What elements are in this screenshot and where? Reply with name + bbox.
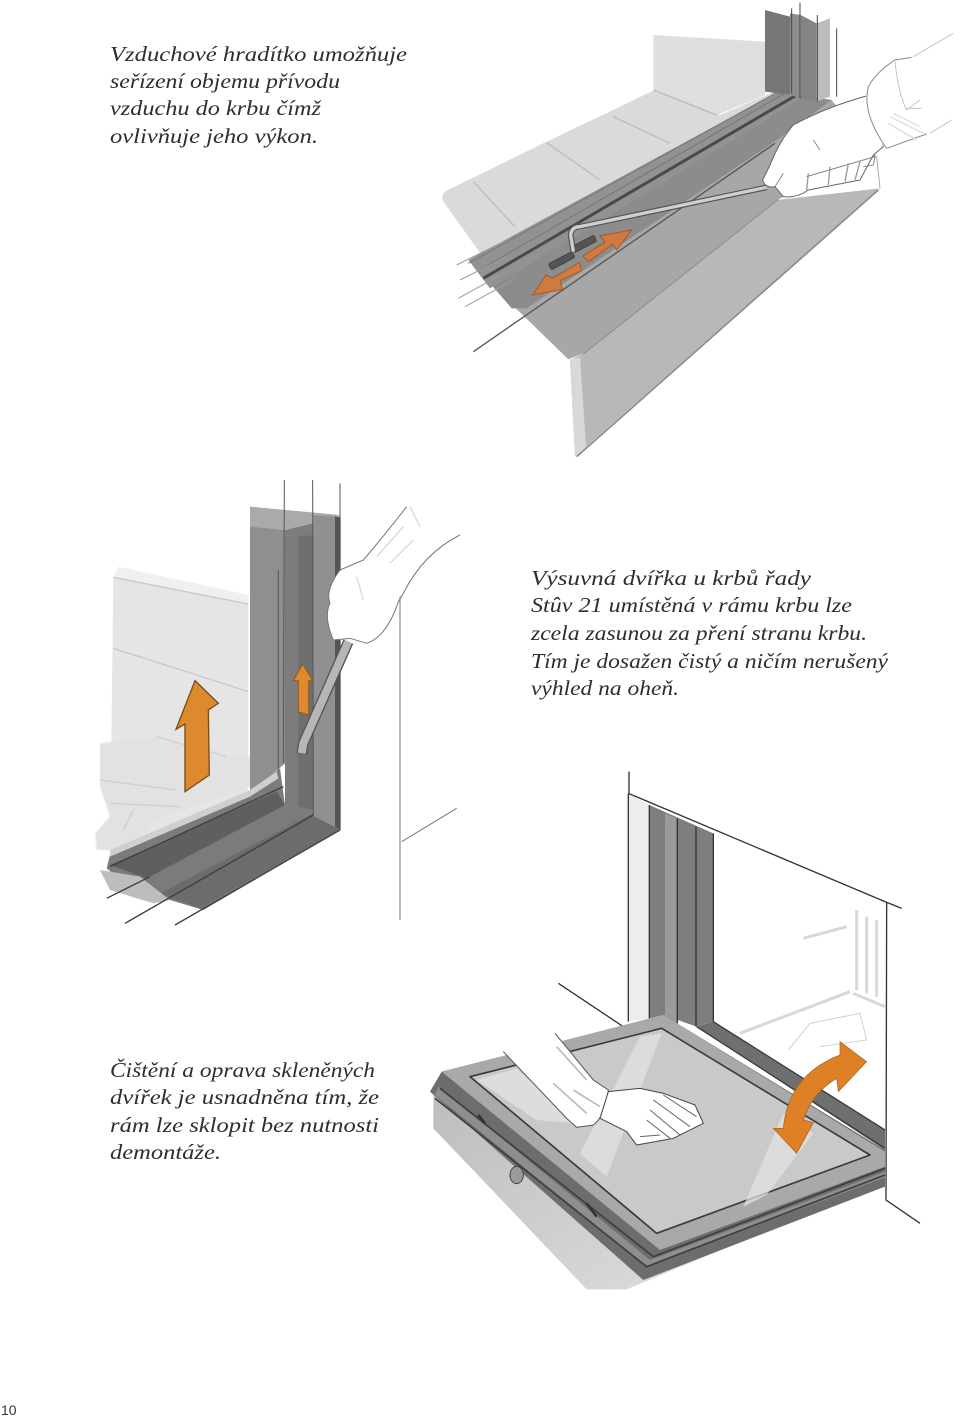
blurred hand behind glass bbox=[95, 737, 277, 850]
damper slot bbox=[548, 235, 597, 270]
sleeve on arm bbox=[503, 1033, 608, 1127]
large orange arrow bbox=[176, 681, 218, 792]
frame rail bbox=[468, 83, 802, 288]
hand on rod bbox=[327, 507, 460, 643]
door handle bbox=[510, 1166, 523, 1184]
lower frame rail bbox=[697, 1022, 885, 1150]
text block: sliding door: zcela zasunou za pření stranu krbu. bbox=[530, 621, 867, 645]
hand with cloth bbox=[600, 1088, 703, 1145]
text block: cleaning glass bbox=[110, 1058, 379, 1164]
glass pane bbox=[470, 1028, 870, 1233]
illustration: sliding door bbox=[95, 480, 460, 925]
text block: sliding door: výhled na oheň. bbox=[531, 676, 679, 700]
text block: cleaning glass: demontáže. bbox=[110, 1140, 221, 1164]
small orange arrow bbox=[293, 664, 313, 715]
text block: air damper: Vzduchové hradítko umožňuje bbox=[110, 42, 407, 66]
text block: cleaning glass: Čištění a oprava skleněných bbox=[110, 1058, 375, 1082]
illustration: tilting door for cleaning bbox=[430, 772, 920, 1289]
lever rod bbox=[571, 187, 767, 252]
text block: air damper bbox=[110, 42, 407, 148]
floor shadow bbox=[433, 1093, 797, 1289]
orange arrow right bbox=[583, 230, 632, 262]
dark frame column bbox=[628, 793, 713, 1027]
back wall panel bbox=[653, 35, 765, 115]
right wall lines bbox=[400, 597, 457, 920]
floor tile joints bbox=[473, 90, 717, 227]
firebox floor bbox=[442, 83, 793, 267]
text block: sliding door: Výsuvná dvířka u krbů řady bbox=[531, 566, 812, 590]
vertical frame post bbox=[765, 3, 837, 102]
text block: sliding door: Stûv 21 umístěná v rámu krbu lze bbox=[531, 593, 852, 617]
front face of sill bbox=[570, 188, 880, 457]
text block: air damper: seřízení objemu přívodu bbox=[110, 69, 340, 93]
illustration: air damper adjustment bbox=[442, 3, 955, 457]
text block: cleaning glass: rám lze sklopit bez nutnosti bbox=[110, 1113, 379, 1137]
hand on lever bbox=[763, 95, 883, 197]
page number: 10 bbox=[1, 1402, 17, 1418]
frame jamb bbox=[250, 480, 341, 830]
hinge clips bbox=[478, 1115, 597, 1217]
sleeve cuff bbox=[865, 33, 955, 149]
frame sill bbox=[100, 768, 340, 925]
text block: air damper: ovlivňuje jeho výkon. bbox=[110, 124, 318, 148]
sill top plate bbox=[490, 95, 877, 359]
orange arrow left bbox=[533, 262, 582, 295]
firebox reflections bbox=[740, 910, 885, 1033]
text block: air damper: vzduchu do krbu čímž bbox=[110, 96, 322, 120]
text block: cleaning glass: dvířek je usnadněna tím, že bbox=[110, 1085, 379, 1109]
curved orange arrow bbox=[773, 1042, 867, 1153]
opening outline lines bbox=[558, 772, 920, 1223]
door frame tilted bbox=[430, 1015, 885, 1280]
wall behind glass bbox=[110, 577, 248, 853]
pull rod bbox=[302, 642, 348, 754]
text block: sliding door bbox=[530, 566, 889, 700]
frame extension lines bbox=[457, 242, 513, 307]
text block: sliding door: Tím je dosažen čistý a ničím nerušený bbox=[531, 649, 889, 673]
white jamb with streaks bbox=[628, 793, 650, 1022]
